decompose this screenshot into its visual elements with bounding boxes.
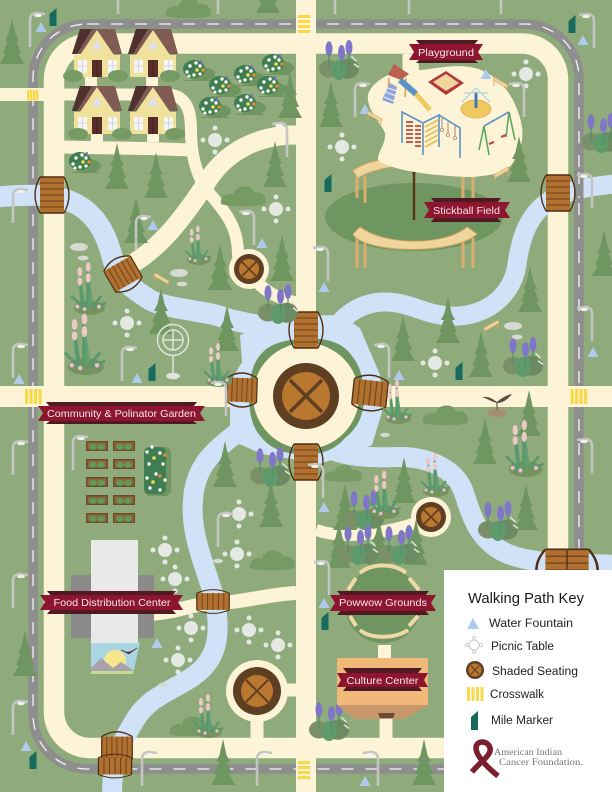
key: mile marker: Mile Marker (491, 715, 553, 727)
banner: Community & Polinator Garden: Community & Polinator Garden (47, 408, 196, 420)
top edge shrub (166, 0, 211, 18)
key: water fountain: Water Fountain (489, 618, 573, 630)
tall flower bed (144, 445, 171, 496)
central seating circle (249, 339, 364, 454)
playground area (368, 54, 522, 177)
garden beds (86, 441, 135, 523)
small seating circle right (411, 497, 451, 537)
banner: Stickball Field: Stickball Field (433, 205, 500, 217)
benches (154, 77, 509, 334)
foxglove clusters (65, 225, 544, 738)
bridges (35, 175, 598, 778)
swing set (479, 112, 515, 155)
banner: Powwow Grounds (330, 591, 436, 615)
slide tower (382, 64, 430, 110)
key: picnic table: Picnic Table (491, 641, 554, 653)
flower bushes (69, 54, 294, 173)
banner: Food Distribution Center: Food Distribution Center (54, 597, 171, 609)
banner: Stickball Field (424, 198, 510, 222)
culture center (337, 658, 428, 719)
shrubs (170, 186, 468, 736)
banner: Community & Polinator Garden (38, 402, 205, 424)
banner: Food Distribution Center (40, 591, 183, 614)
key: mile marker (471, 711, 553, 730)
sandbox (428, 71, 464, 95)
road over river on the right (574, 170, 584, 200)
key: shaded seating: Shaded Seating (492, 666, 578, 678)
logo: American Indian Cancer Foundation: Cancer Foundation. (499, 758, 583, 768)
merry-go-round (461, 88, 491, 118)
logo: American Indian Cancer Foundation: American Indian (494, 748, 562, 758)
banner: Culture Center: Culture Center (346, 675, 419, 687)
rocks (70, 243, 522, 687)
banner: Playground: Playground (418, 47, 474, 59)
key: picnic table (465, 636, 554, 654)
powwow grounds (345, 566, 421, 643)
houses (63, 29, 185, 140)
key: crosswalk: Crosswalk (490, 689, 544, 701)
key title: Walking Path Key (468, 590, 584, 607)
banner: Powwow Grounds: Powwow Grounds (339, 597, 427, 609)
key: shaded seating (466, 661, 578, 679)
small seating circle upper (229, 249, 269, 289)
river (0, 184, 612, 792)
logo: American Indian Cancer Foundation (472, 742, 583, 776)
banner: Playground (409, 40, 483, 63)
panel: walking path key (444, 570, 612, 792)
picnic tables (112, 60, 540, 674)
key: crosswalk (467, 687, 544, 701)
sculpture (158, 324, 188, 378)
food distribution center building (71, 540, 154, 674)
stickball field (325, 157, 503, 268)
bird sculpture (482, 394, 512, 417)
lupine clusters (250, 40, 612, 741)
banner: Culture Center (337, 668, 428, 691)
seating circle lower left (226, 660, 288, 722)
climbing frames (402, 112, 460, 158)
